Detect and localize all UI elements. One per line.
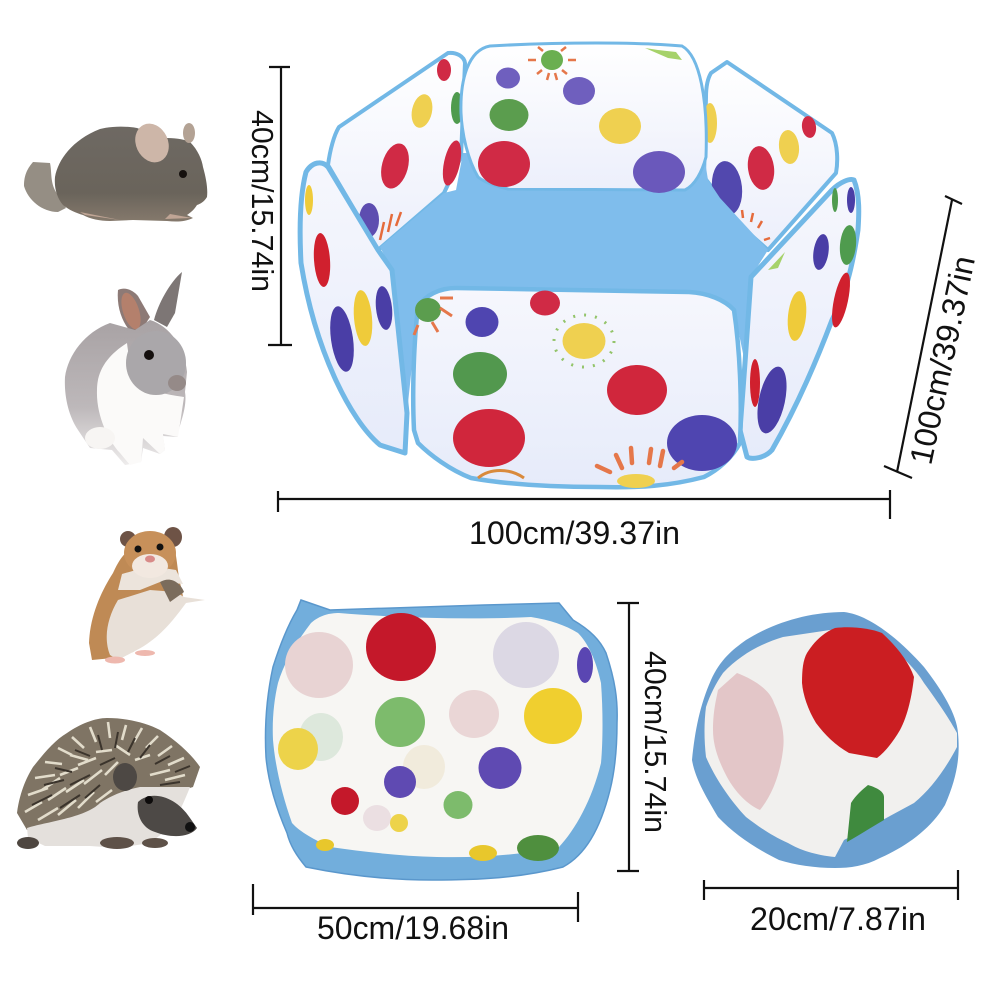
panel: floor xyxy=(380,153,768,413)
dimension: folded width 50cm xyxy=(253,884,578,946)
dimension: folded height 40cm xyxy=(617,603,672,871)
dimension: width 100cm xyxy=(278,490,890,551)
dimension: folded height 40cm: 40cm/15.74in xyxy=(638,651,672,833)
icon: hamster xyxy=(89,527,205,664)
icon: rabbit xyxy=(65,272,187,465)
panel: front wall xyxy=(413,288,741,488)
playpen xyxy=(300,43,859,488)
dimension: folded width 50cm: 50cm/19.68in xyxy=(317,910,509,946)
panel: back right wall xyxy=(690,62,837,250)
dimension: depth 100cm: 100cm/39.37in xyxy=(903,253,982,467)
dimension: depth 100cm xyxy=(884,196,982,478)
icon: chinchilla xyxy=(24,118,207,222)
dimension: width 100cm: 100cm/39.37in xyxy=(469,515,680,551)
panel: back centre wall xyxy=(461,43,706,193)
folded pen: side view xyxy=(692,612,959,868)
folded pen: front view xyxy=(265,600,617,880)
dimension: folded depth 20cm xyxy=(704,870,958,937)
dimension: height 40cm: 40cm/15.74in xyxy=(245,110,279,292)
icon: hedgehog xyxy=(17,718,200,849)
panel: right wall xyxy=(740,179,859,458)
dimension: height 40cm xyxy=(245,67,292,345)
panel: left wall xyxy=(300,163,407,453)
panel: back left wall xyxy=(328,53,465,250)
dimension: folded depth 20cm: 20cm/7.87in xyxy=(750,901,926,937)
